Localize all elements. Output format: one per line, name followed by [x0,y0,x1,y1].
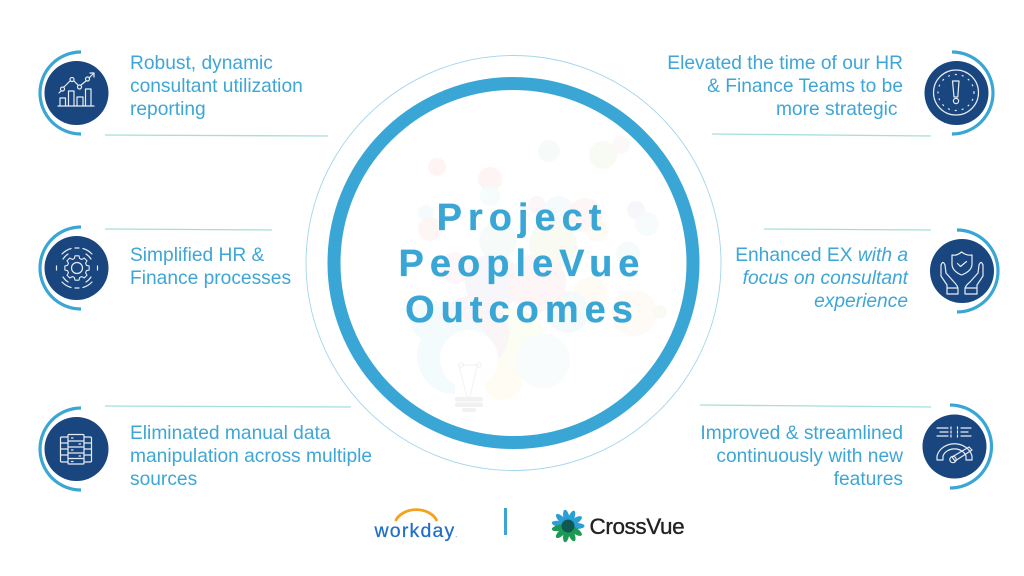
item: enhanced EX [735,229,998,312]
logo: CrossVue: CrossVue [590,514,684,539]
divider between logos [504,508,507,535]
item: eliminated manual data manipulation [40,406,372,490]
text: enhanced EX: experience [814,291,908,312]
text: utilization reporting: reporting [130,99,206,120]
icon: CrossVue flower [551,509,584,543]
text: improved and streamlined: Improved & streamlined [700,423,903,444]
logo: Workday [374,510,458,542]
heading: Project PeopleVue Outcomes: Outcomes [405,289,639,331]
heading: Project PeopleVue Outcomes: Project [437,197,607,239]
text: enhanced EX: Enhanced EX with a [735,245,908,266]
icon: chart [58,73,94,106]
text: eliminated manual data: sources [130,469,197,490]
heading: Project PeopleVue Outcomes: PeopleVue [399,243,645,285]
text: elevated time: & Finance Teams to be [707,76,903,97]
text: improved and streamlined: continuously with new [716,446,903,467]
text: eliminated manual data: Eliminated manual data [130,423,331,444]
icon: hands with shield [941,252,983,294]
text: simplified processes: Simplified HR & [130,245,265,266]
item: simplified processes [40,227,291,309]
text: utilization reporting: consultant utilization [130,76,303,97]
central circle [306,56,721,470]
icon: exclamation [934,70,978,115]
text: improved and streamlined: features [834,469,903,490]
item: consultant utilization reporting [40,52,328,136]
item: elevated time of teams [667,52,993,136]
icon: gear [56,248,98,288]
item: improved and streamlined [700,405,991,490]
illustration: light bulb with coloured bubbles [410,136,667,412]
text: elevated time: Elevated the time of our HR [667,53,903,74]
text: enhanced EX: focus on consultant [743,268,909,289]
logo: Workday: workday. [374,520,458,542]
text: eliminated manual data: manipulation across multiple [130,446,372,467]
logo: CrossVue [551,509,684,543]
icon: server racks [60,434,92,464]
text: utilization reporting: Robust, dynamic [130,53,273,74]
heading: Project PeopleVue Outcomes [399,197,645,331]
text: simplified processes: Finance processes [130,268,291,289]
icon: speedometer [937,427,972,463]
text: elevated time: more strategic [776,99,898,120]
